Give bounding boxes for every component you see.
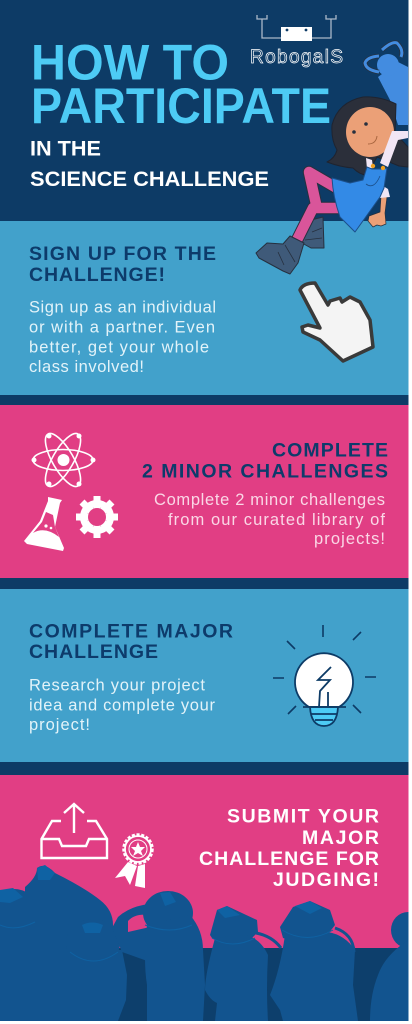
back boot xyxy=(302,217,324,248)
heading: sign up: SIGN UP FOR THE xyxy=(29,243,216,265)
back figure helmet xyxy=(25,866,113,950)
heading: major challenge: CHALLENGE xyxy=(29,641,158,663)
icon: award rosette xyxy=(115,835,152,888)
panel: minor challenges background xyxy=(0,405,408,578)
text: major challenge description: idea and complete your xyxy=(29,697,216,715)
salute figure helmet xyxy=(143,891,193,935)
robot arm xyxy=(378,62,408,125)
front figure helmet xyxy=(66,919,120,967)
text: minor challenges description xyxy=(154,491,385,548)
divider band 1 xyxy=(0,395,408,405)
icon: flask xyxy=(24,497,64,551)
icon: light bulb xyxy=(273,625,376,726)
logo: Robogals xyxy=(250,15,343,68)
heading: minor challenges: COMPLETE xyxy=(272,440,388,462)
text: sign up description: or with a partner. Even xyxy=(29,319,215,337)
panel: submit background xyxy=(0,775,408,948)
right figure body xyxy=(370,940,408,1021)
text: minor challenges description: from our curated library of xyxy=(168,511,385,529)
fourth figure hose xyxy=(335,928,354,952)
hair xyxy=(327,97,408,175)
heading: submit: CHALLENGE FOR xyxy=(199,848,379,870)
text: sign up description xyxy=(29,299,216,376)
text: sign up description: class involved! xyxy=(29,358,144,376)
subtitle xyxy=(30,138,269,191)
icon: upload tray xyxy=(42,804,107,858)
third figure hose xyxy=(256,933,281,948)
divider band 2 xyxy=(0,578,408,589)
robot claw outlines xyxy=(365,43,402,72)
subtitle: IN THE xyxy=(30,138,101,160)
text: major challenge description xyxy=(29,677,216,734)
panel: major challenge background xyxy=(0,589,408,762)
panel: header background xyxy=(0,0,408,221)
face xyxy=(346,107,394,157)
text: sign up description: Sign up as an individual xyxy=(29,299,216,317)
heading: submit: SUBMIT YOUR xyxy=(227,806,379,828)
robot claws xyxy=(365,43,402,72)
pocket xyxy=(366,176,380,186)
text: minor challenges description: projects! xyxy=(314,530,385,548)
robot head xyxy=(377,54,399,76)
subtitle: SCIENCE CHALLENGE xyxy=(30,168,269,191)
icon: atom xyxy=(32,429,96,491)
third figure helmet xyxy=(210,906,258,945)
helmet rings xyxy=(0,922,333,961)
heading: submit xyxy=(199,806,379,891)
title: HOW TO xyxy=(31,34,229,90)
heading: sign up: CHALLENGE! xyxy=(29,264,165,286)
text: minor challenges description: Complete 2 minor challenges xyxy=(154,491,385,509)
fourth figure helmet xyxy=(280,901,335,943)
pink leg outline xyxy=(297,172,343,240)
left figures body xyxy=(0,915,127,1021)
title: PARTICIPATE xyxy=(31,78,331,134)
icon: gear xyxy=(76,496,118,538)
text: sign up description: better, get your whole xyxy=(29,339,209,357)
panel: sign up background xyxy=(0,221,408,395)
heading: sign up xyxy=(29,243,216,286)
heading: minor challenges: 2 MINOR CHALLENGES xyxy=(142,461,388,483)
silhouettes: group of students in helmets xyxy=(0,865,412,1021)
pink legs xyxy=(297,172,343,240)
far left helmet xyxy=(0,889,37,927)
heading: major challenge xyxy=(29,621,233,663)
fourth figure body xyxy=(270,932,358,1021)
buttons xyxy=(371,164,375,168)
helmet highlights xyxy=(0,865,322,933)
character: girl hanging from robot arm xyxy=(256,43,408,274)
heading: minor challenges xyxy=(142,440,388,483)
lower arm and hand xyxy=(368,196,387,227)
heading: submit: MAJOR xyxy=(302,827,379,849)
boot straps xyxy=(278,228,322,265)
collar xyxy=(366,158,373,169)
heading: major challenge: COMPLETE MAJOR xyxy=(29,621,233,643)
sleeve xyxy=(380,131,408,167)
right figure helmet xyxy=(391,912,412,948)
icon: pointing hand xyxy=(300,283,373,361)
front boot xyxy=(256,236,304,274)
raised arm xyxy=(112,904,150,962)
logo: Robogals: RobogalS xyxy=(250,47,343,68)
text: major challenge description: Research your project xyxy=(29,677,205,695)
right edge strip xyxy=(408,0,412,1024)
overalls xyxy=(332,167,387,232)
text: major challenge description: project! xyxy=(29,716,90,734)
divider band 3 xyxy=(0,762,408,775)
panel: footer band xyxy=(0,948,408,1021)
salute figure body xyxy=(145,915,205,1021)
lower sleeve xyxy=(379,186,390,198)
title xyxy=(31,34,331,134)
third figure body xyxy=(205,935,268,1021)
heading: submit: JUDGING! xyxy=(273,869,379,891)
